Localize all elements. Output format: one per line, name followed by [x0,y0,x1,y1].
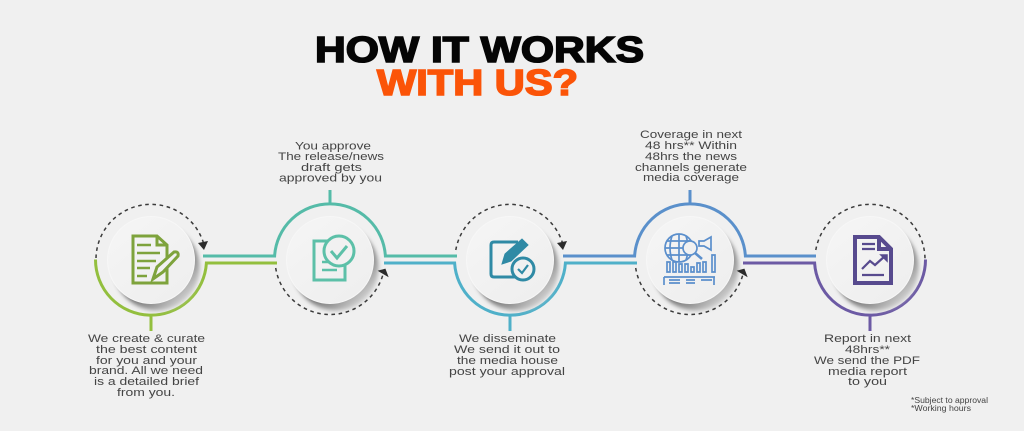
connector: step 3 [384,263,637,331]
step 4 node [636,216,748,315]
step 1 node [96,204,208,310]
footnotes: *Working hours [911,404,971,413]
text: step 1 description: is a detailed brief [94,376,200,388]
text: step 5 description: to you [848,376,887,388]
step 5 node [816,204,925,310]
text: step 4 description: Coverage in next [640,129,743,141]
text: step 4 description: 48hrs the news [645,151,737,163]
icon: approved document [314,236,354,280]
connector: step 4 [563,190,816,256]
text: step 1 description: We create & curate [88,333,205,345]
text: step 2 description: The release/news [278,151,384,163]
text: step 3 description: We send it out to [454,344,560,356]
icon: edit and clock [491,239,534,280]
text: step 3 description: post your approval [449,366,565,378]
title [315,29,644,103]
text: step 1 description [88,333,205,399]
text: step 4 description: 48 hrs** Within [645,140,737,152]
text: step 5 description [814,333,920,388]
text: step 2 description [278,140,384,184]
icon: report with trend [855,237,891,283]
text: step 5 description: Report in next [824,333,912,345]
step 3 node [456,204,567,310]
text: step 1 description: the best content [96,344,198,356]
text: step 1 description: for you and your [96,355,197,367]
text: step 1 description: brand. All we need [89,365,203,377]
text: step 5 description: media report [828,366,908,378]
text: step 3 description: the media house [457,355,558,367]
connector: step 5 [743,260,926,331]
text: step 2 description: You approve [295,140,371,152]
text: step 5 description: 48hrs** [845,344,891,356]
footnotes [911,396,988,413]
title: WITH US? [377,62,578,103]
connector: step 1 to step 2 [95,190,457,331]
text: step 3 description: We disseminate [459,333,556,345]
text: step 3 description [449,333,565,378]
step 2 node [276,216,389,315]
text: step 1 description: from you. [117,387,175,399]
icon: document and pencil [133,236,178,283]
text: step 4 description: media coverage [643,172,739,184]
footnotes: *Subject to approval [911,396,988,405]
text: step 5 description: We send the PDF [814,355,920,367]
text: step 2 description: approved by you [279,172,382,184]
icon: globe, megaphone and bars [664,234,715,285]
text: step 4 description [635,129,747,184]
title: HOW IT WORKS [315,29,644,70]
text: step 4 description: channels generate [635,162,747,174]
text: step 2 description: draft gets [301,162,362,174]
